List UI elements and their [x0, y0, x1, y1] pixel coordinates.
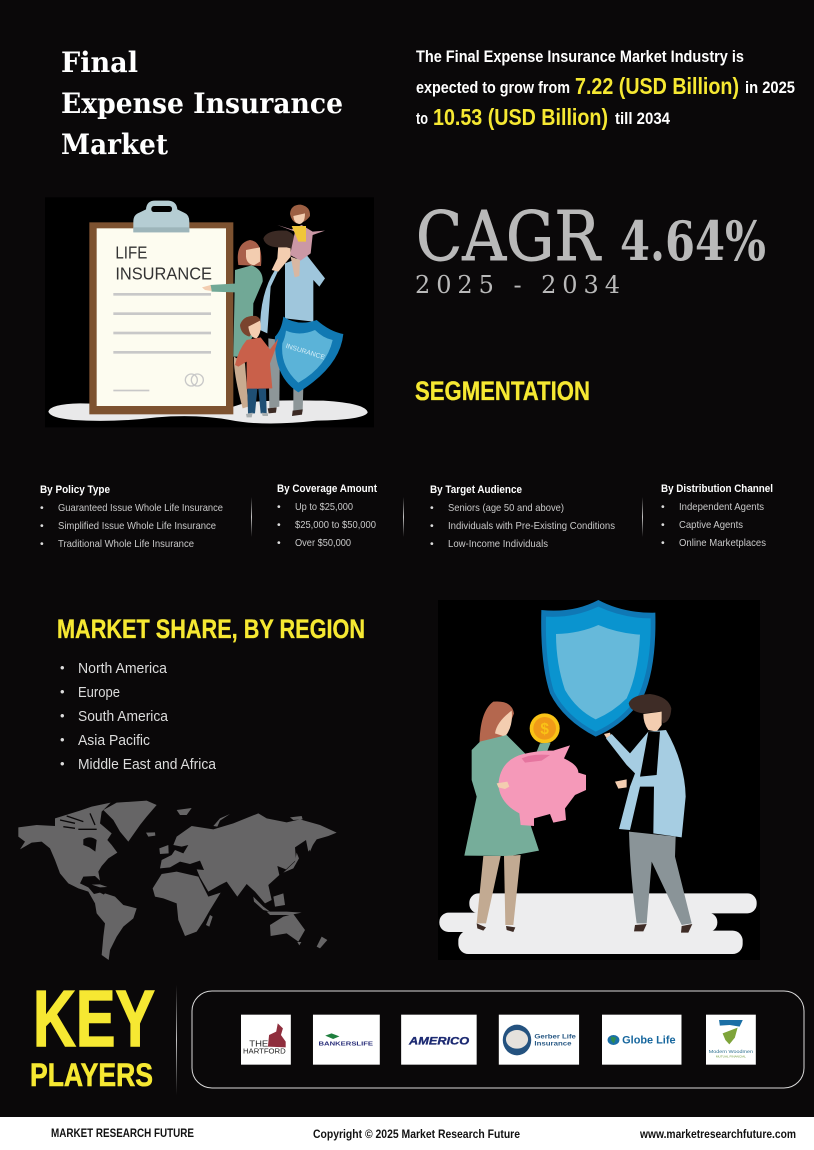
- illustration: life insurance family: [45, 197, 374, 427]
- panel: by coverage amount: •: [277, 501, 281, 513]
- woman: [479, 701, 514, 762]
- market forecast summary: in 2025: [745, 78, 795, 97]
- logo: Gerber Life Insurance: [499, 1015, 579, 1065]
- panel: by policy type: •: [40, 538, 44, 550]
- region list: [60, 660, 217, 773]
- panel: by policy type: Traditional Whole Life Insurance: [58, 538, 194, 550]
- panel: by target audience: •: [430, 520, 434, 532]
- piggy bank: [498, 745, 586, 826]
- market forecast summary: The Final Expense Insurance Market Industry is: [416, 47, 744, 66]
- logo: Globe Life: [602, 1015, 681, 1065]
- panel: by policy type: [40, 484, 223, 550]
- panel: by target audience: Seniors (age 50 and above): [448, 502, 564, 514]
- logo: Modern Woodmen: Modern Woodmen: [709, 1049, 753, 1055]
- panel: by coverage amount: By Coverage Amount: [277, 483, 377, 495]
- heading: key players: PLAYERS: [30, 1057, 153, 1093]
- region list: South America: [78, 708, 169, 725]
- heading: key players: KEY: [33, 974, 155, 1063]
- region list: •: [60, 708, 65, 723]
- shield: [275, 317, 343, 392]
- market forecast summary: till 2034: [615, 109, 670, 128]
- logo: The Hartford: THE: [249, 1039, 268, 1048]
- baby: [290, 205, 310, 223]
- region list: •: [60, 732, 65, 747]
- panel: by coverage amount: $25,000 to $50,000: [295, 519, 376, 531]
- title: Market: [61, 128, 168, 161]
- title: Expense Insurance: [61, 87, 343, 120]
- panel: by policy type: By Policy Type: [40, 484, 110, 496]
- shield: [541, 600, 655, 737]
- logo: The Hartford: HARTFORD: [243, 1047, 286, 1055]
- panel: by distribution channel: •: [661, 501, 665, 513]
- panel: by coverage amount: •: [277, 519, 281, 531]
- panel: by coverage amount: [277, 483, 377, 549]
- panel: by policy type: •: [40, 502, 44, 514]
- panel: by policy type: •: [40, 520, 44, 532]
- logo: Gerber Life Insurance: Gerber Life: [534, 1032, 576, 1040]
- panel: by target audience: Low-Income Individuals: [448, 538, 548, 550]
- region list: •: [60, 756, 65, 771]
- logo: Bankers Life: [313, 1015, 380, 1065]
- region list: •: [60, 660, 65, 675]
- panel: by target audience: •: [430, 538, 434, 550]
- panel: by target audience: [430, 484, 615, 550]
- market forecast summary: 7.22 (USD Billion): [575, 73, 739, 99]
- region list: Asia Pacific: [78, 732, 150, 749]
- logo: Americo: [401, 1015, 477, 1065]
- logo: Bankers Life: BANKERSLIFE: [319, 1041, 373, 1047]
- region list: North America: [78, 660, 168, 677]
- panel: by coverage amount: Over $50,000: [295, 537, 351, 549]
- illustration: life insurance family: INSURANCE: [285, 343, 326, 362]
- panel: by distribution channel: Online Marketplaces: [679, 537, 766, 549]
- clipboard: [89, 222, 233, 414]
- heading: segmentation: SEGMENTATION: [415, 376, 590, 406]
- panel: by target audience: Individuals with Pre-Existing Conditions: [448, 520, 615, 532]
- world map: [18, 801, 337, 960]
- CAGR figure: 2025 - 2034: [415, 271, 620, 299]
- panel: by target audience: •: [430, 502, 434, 514]
- panel: by policy type: Simplified Issue Whole Life Insurance: [58, 520, 216, 532]
- panel: by target audience: By Target Audience: [430, 484, 522, 496]
- market forecast summary: to: [416, 109, 428, 128]
- man: [629, 694, 671, 723]
- panel: by distribution channel: •: [661, 537, 665, 549]
- heading: key players: [30, 974, 155, 1093]
- panel: by distribution channel: •: [661, 519, 665, 531]
- logo: Globe Life: Globe Life: [622, 1035, 676, 1046]
- panel: by distribution channel: Captive Agents: [679, 519, 743, 531]
- ground: [439, 893, 757, 954]
- CAGR figure: 4.64%: [620, 209, 766, 273]
- footer: MARKET RESEARCH FUTURE: [51, 1126, 194, 1140]
- illustration: couple with piggy bank and shield: $: [540, 721, 549, 738]
- mother: [238, 240, 261, 266]
- market forecast summary: 10.53 (USD Billion): [433, 104, 608, 130]
- panel: by policy type: Guaranteed Issue Whole Life Insurance: [58, 502, 223, 514]
- coin: [530, 713, 560, 743]
- illustration: life insurance family: LIFE: [115, 242, 147, 262]
- logo: The Hartford: [241, 1015, 291, 1065]
- ground: [48, 400, 368, 424]
- region list: Middle East and Africa: [78, 756, 217, 773]
- father: [285, 255, 325, 322]
- market forecast summary: [416, 47, 795, 130]
- logo: Modern Woodmen: [706, 1015, 756, 1065]
- title: [61, 46, 343, 161]
- panel: by distribution channel: Independent Agents: [679, 501, 764, 513]
- panel: key player logos: [192, 991, 804, 1088]
- logo: Americo: AMERICO: [408, 1034, 469, 1047]
- child: [240, 316, 260, 337]
- illustration: life insurance family: INSURANCE: [115, 263, 212, 283]
- market forecast summary: expected to grow from: [416, 78, 570, 97]
- logo: Gerber Life Insurance: Insurance: [534, 1039, 572, 1047]
- footer: Copyright © 2025 Market Research Future: [313, 1127, 520, 1141]
- CAGR figure: [415, 198, 766, 299]
- panel: by coverage amount: Up to $25,000: [295, 501, 353, 513]
- panel: by distribution channel: By Distribution Channel: [661, 483, 773, 495]
- region list: •: [60, 684, 65, 699]
- illustration: couple with piggy bank and shield: [438, 600, 760, 960]
- footer: [0, 1117, 814, 1150]
- panel: by coverage amount: •: [277, 537, 281, 549]
- logo: Modern Woodmen: MUTUAL FINANCIAL: [716, 1055, 746, 1059]
- panel: by distribution channel: [661, 483, 773, 549]
- heading: market share by region: MARKET SHARE, BY REGION: [57, 614, 365, 644]
- CAGR figure: CAGR: [416, 198, 602, 277]
- title: Final: [61, 46, 138, 79]
- region list: Europe: [78, 684, 120, 701]
